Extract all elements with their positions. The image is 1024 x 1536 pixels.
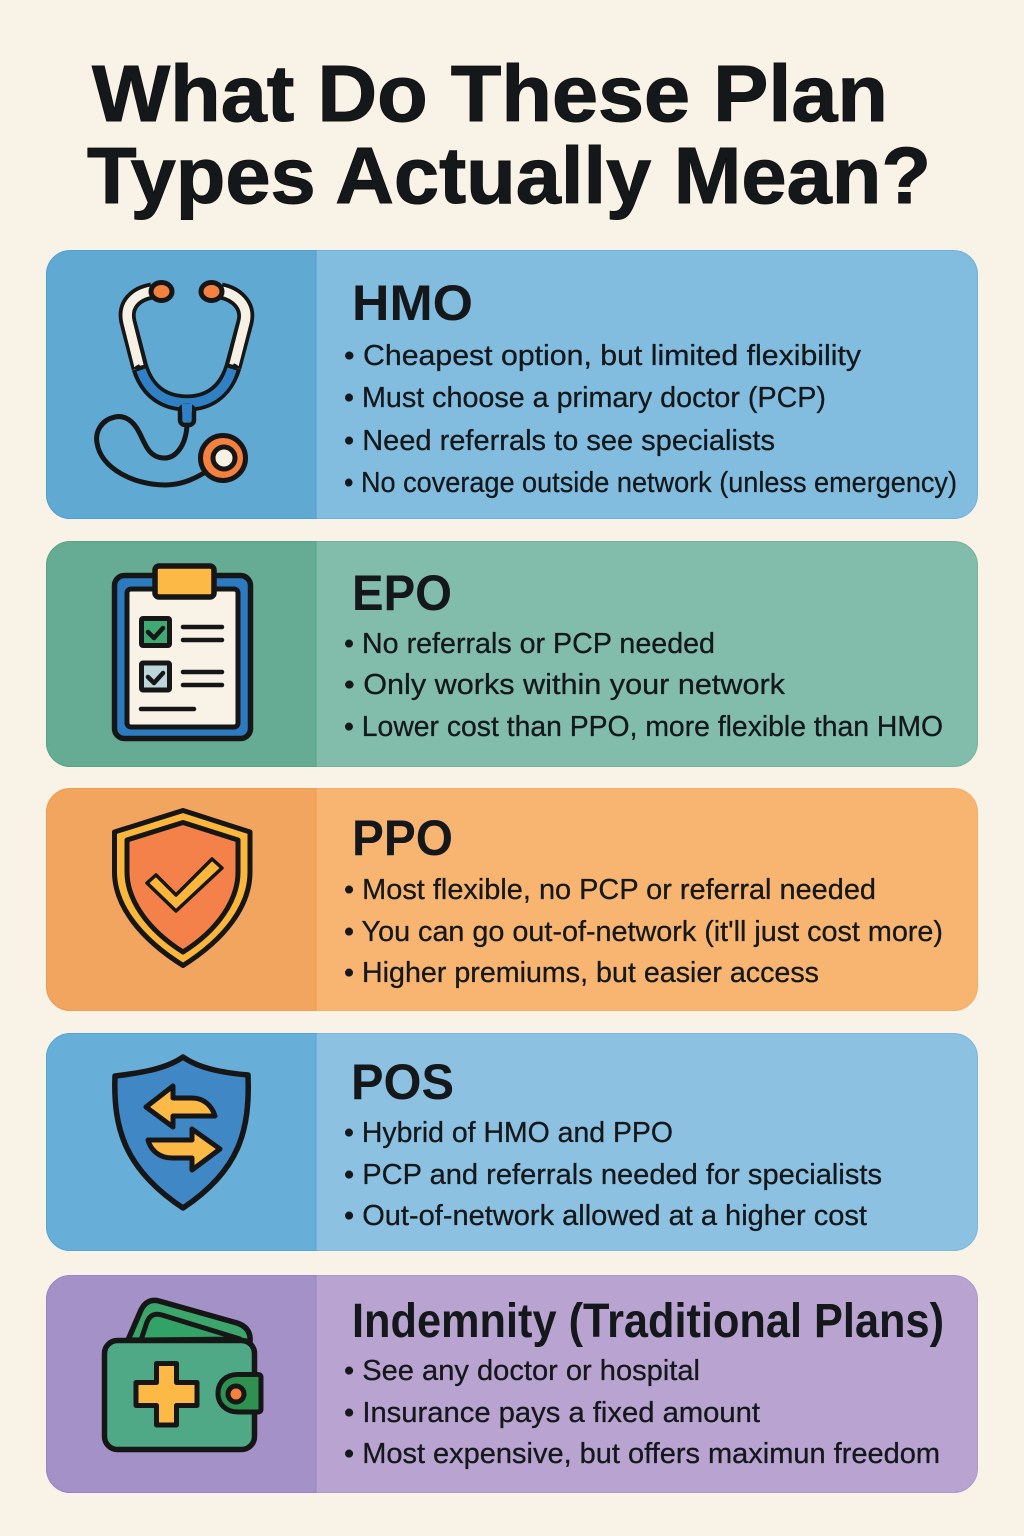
bullet list: POS [344,1117,882,1232]
bullet list: PPO [344,874,943,989]
icon: wallet with medical cross [104,1300,261,1450]
panel: EPO [46,542,978,766]
bullet list: HMO: • No coverage outside network (unless emergency) [344,467,957,499]
panel: Indemnity [46,1276,978,1492]
bullet list: EPO: • Lower cost than PPO, more flexible than HMO [344,711,943,743]
icon: shield with check [114,810,250,966]
bullet list: Indemnity: • Insurance pays a fixed amount [344,1397,760,1429]
icon: stethoscope [97,282,246,485]
bullet list: HMO: • Must choose a primary doctor (PCP) [344,382,826,414]
heading: HMO: HMO [352,275,473,331]
heading: POS: POS [351,1054,454,1110]
bullet list: Indemnity: • See any doctor or hospital [344,1355,700,1387]
bullet list: HMO [344,340,957,499]
bullet list: POS: • Out-of-network allowed at a higher cost [344,1200,867,1232]
panel: PPO [46,788,978,1010]
bullet list: PPO: • Most flexible, no PCP or referral needed [344,874,876,906]
bullet list: Indemnity: • Most expensive, but offers maximun freedom [344,1438,940,1470]
bullet list: Indemnity [344,1355,940,1470]
bullet list: HMO: • Need referrals to see specialists [344,425,775,457]
bullet list: EPO [344,628,943,743]
title: Types Actually Mean? [87,131,931,220]
bullet list: PPO: • You can go out-of-network (it'll just cost more) [344,916,943,948]
title: What Do These Plan [92,49,888,138]
bullet list: HMO: • Cheapest option, but limited flexibility [344,340,862,372]
bullet list: POS: • PCP and referrals needed for specialists [344,1159,882,1191]
icon: shield with exchange arrows [115,1057,248,1208]
heading: Indemnity: Indemnity (Traditional Plans) [352,1295,944,1348]
panel: POS [46,1034,978,1250]
heading: EPO: EPO [352,565,452,621]
bullet list: POS: • Hybrid of HMO and PPO [344,1117,673,1149]
title [87,49,931,220]
heading: PPO: PPO [352,810,453,866]
bullet list: EPO: • No referrals or PCP needed [344,628,715,660]
bullet list: EPO: • Only works within your network [344,669,786,701]
icon: clipboard checklist [114,566,250,738]
panel: HMO [46,250,978,518]
bullet list: PPO: • Higher premiums, but easier access [344,957,819,989]
